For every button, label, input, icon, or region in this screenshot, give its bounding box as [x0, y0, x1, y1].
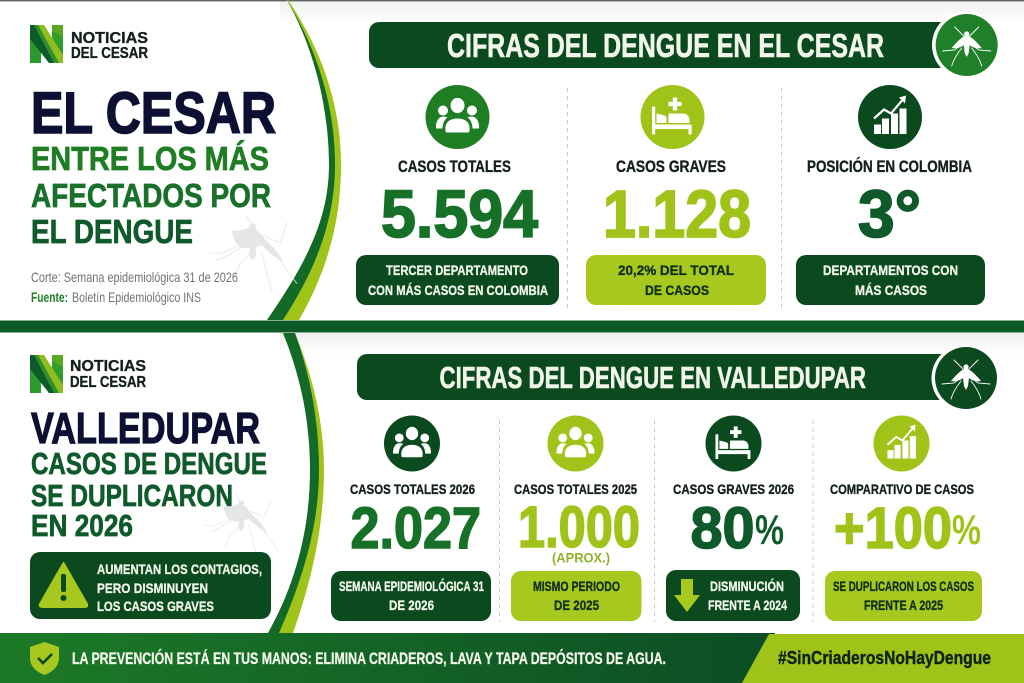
stat: casos graves 2026: FRENTE A 2024	[708, 597, 787, 613]
stat: comparativo de casos: FRENTE A 2025	[864, 597, 943, 613]
dividers	[568, 88, 782, 310]
prevention message: LA PREVENCIÓN ESTÁ EN TUS MANOS: ELIMINA CRIADEROS, LAVA Y TAPA DEPÓSITOS DE AGUA.	[72, 649, 666, 668]
stat: casos graves: 1.128	[603, 177, 751, 252]
callout: warning: PERO DISMINUYEN	[97, 580, 208, 596]
stat: comparativo de casos: +100	[834, 496, 952, 561]
header bar: CIFRAS DEL DENGUE EN EL CESAR	[447, 27, 884, 64]
logo: Noticias del Cesar: NOTICIAS	[71, 30, 148, 47]
title: Valledupar: VALLEDUPAR	[31, 404, 260, 453]
stat: casos totales 2026: DE 2026	[389, 597, 434, 613]
header bar: CIFRAS DEL DENGUE EN VALLEDUPAR	[440, 360, 866, 395]
source note	[31, 269, 238, 305]
icon: warning triangle	[40, 563, 87, 607]
stat: casos graves 2026: CASOS GRAVES 2026	[673, 481, 794, 497]
subtitle	[31, 140, 271, 250]
callout: warning: AUMENTAN LOS CONTAGIOS,	[97, 561, 262, 577]
stat: posicion en Colombia: POSICIÓN EN COLOMBIA	[807, 157, 972, 176]
subtitle: EL DENGUE	[31, 213, 193, 250]
stat: posicion en Colombia: 3°	[858, 177, 921, 252]
stat: casos totales	[356, 85, 559, 305]
stat: casos graves: 20,2% DEL TOTAL	[618, 262, 734, 278]
stat: comparativo de casos: COMPARATIVO DE CASOS	[830, 481, 974, 497]
logo: Noticias del Cesar: NOTICIAS	[70, 358, 146, 375]
stat: casos totales 2025: 1.000	[518, 495, 640, 560]
logo: Noticias del Cesar	[30, 25, 148, 63]
stat: casos totales 2025: (APROX.)	[552, 550, 610, 566]
stat: casos totales 2026: SEMANA EPIDEMIOLÓGICA 31	[339, 577, 484, 594]
stat: casos graves	[586, 85, 766, 305]
subtitle: AFECTADOS POR	[31, 177, 271, 214]
stat: casos graves 2026: %	[755, 506, 784, 553]
source note: Corte: Semana epidemiológica 31 de 2026	[31, 269, 238, 285]
stat: posicion en Colombia: MÁS CASOS	[855, 282, 927, 298]
stat: casos graves: DE CASOS	[645, 282, 709, 298]
stat: casos totales 2026: CASOS TOTALES 2026	[350, 481, 475, 497]
source note: Boletín Epidemiológico INS	[72, 289, 201, 305]
stat: casos totales 2025: CASOS TOTALES 2025	[514, 481, 637, 497]
panel: cifras Valledupar	[331, 344, 998, 622]
footer band	[0, 633, 1024, 683]
subtitle: CASOS DE DENGUE	[31, 446, 267, 481]
subtitle: EN 2026	[31, 508, 133, 543]
subtitle	[31, 446, 267, 543]
panel: cifras background top	[280, 0, 1024, 24]
source note: Fuente:	[31, 289, 68, 305]
stat: posicion en Colombia: DEPARTAMENTOS CON	[823, 262, 958, 278]
header bar	[369, 22, 959, 68]
subtitle: ENTRE LOS MÁS	[31, 140, 269, 177]
stat: casos totales 2026	[331, 416, 491, 621]
icon: mosquito watermark	[210, 216, 297, 290]
stat: casos totales: TERCER DEPARTAMENTO	[386, 262, 528, 278]
logo: Noticias del Cesar: DEL CESAR	[70, 374, 146, 391]
stat: casos totales: CASOS TOTALES	[398, 158, 511, 176]
panel: El Cesar left	[30, 0, 341, 320]
icon: down arrow	[674, 579, 700, 612]
curved band	[268, 333, 324, 633]
icon: mosquito badge	[932, 344, 998, 412]
stat: comparativo de casos: %	[952, 506, 981, 553]
stat: casos totales 2025: MISMO PERIODO	[533, 578, 620, 594]
stat: casos totales 2025	[511, 416, 642, 621]
stat: casos totales 2026: 2.027	[350, 496, 481, 561]
logo: Noticias del Cesar	[30, 355, 146, 393]
panel: Valledupar left	[30, 333, 324, 633]
logo: Noticias del Cesar: DEL CESAR	[71, 45, 148, 62]
stat: casos graves 2026: DISMINUCIÓN	[710, 577, 784, 594]
header bar	[357, 354, 957, 400]
stat: casos graves 2026	[666, 416, 800, 621]
divider band	[0, 320, 1024, 332]
stat: casos totales 2025: DE 2025	[554, 597, 599, 613]
callout: warning	[30, 552, 271, 619]
hashtag: #SinCriaderosNoHayDengue	[778, 648, 991, 668]
subtitle: SE DUPLICARON	[31, 478, 233, 513]
panel: cifras background bottom	[280, 333, 1024, 355]
stat: casos totales: 5.594	[381, 177, 538, 252]
icon: shield	[30, 642, 59, 675]
callout: warning: LOS CASOS GRAVES	[97, 598, 214, 614]
stat: posicion en Colombia	[796, 85, 985, 305]
hashtag	[742, 634, 1024, 683]
title: El Cesar: EL CESAR	[31, 81, 276, 146]
curved band	[267, 0, 341, 320]
panel: cifras El Cesar	[356, 12, 999, 310]
icon: mosquito badge	[932, 12, 999, 78]
stat: casos graves: CASOS GRAVES	[616, 158, 726, 176]
icon: mosquito watermark	[205, 494, 279, 557]
dividers	[500, 420, 813, 622]
stat: casos graves 2026: 80	[690, 496, 754, 561]
stat: casos totales: CON MÁS CASOS EN COLOMBIA	[368, 282, 548, 298]
top edge line	[0, 0, 1024, 1]
stat: comparativo de casos	[825, 416, 982, 621]
